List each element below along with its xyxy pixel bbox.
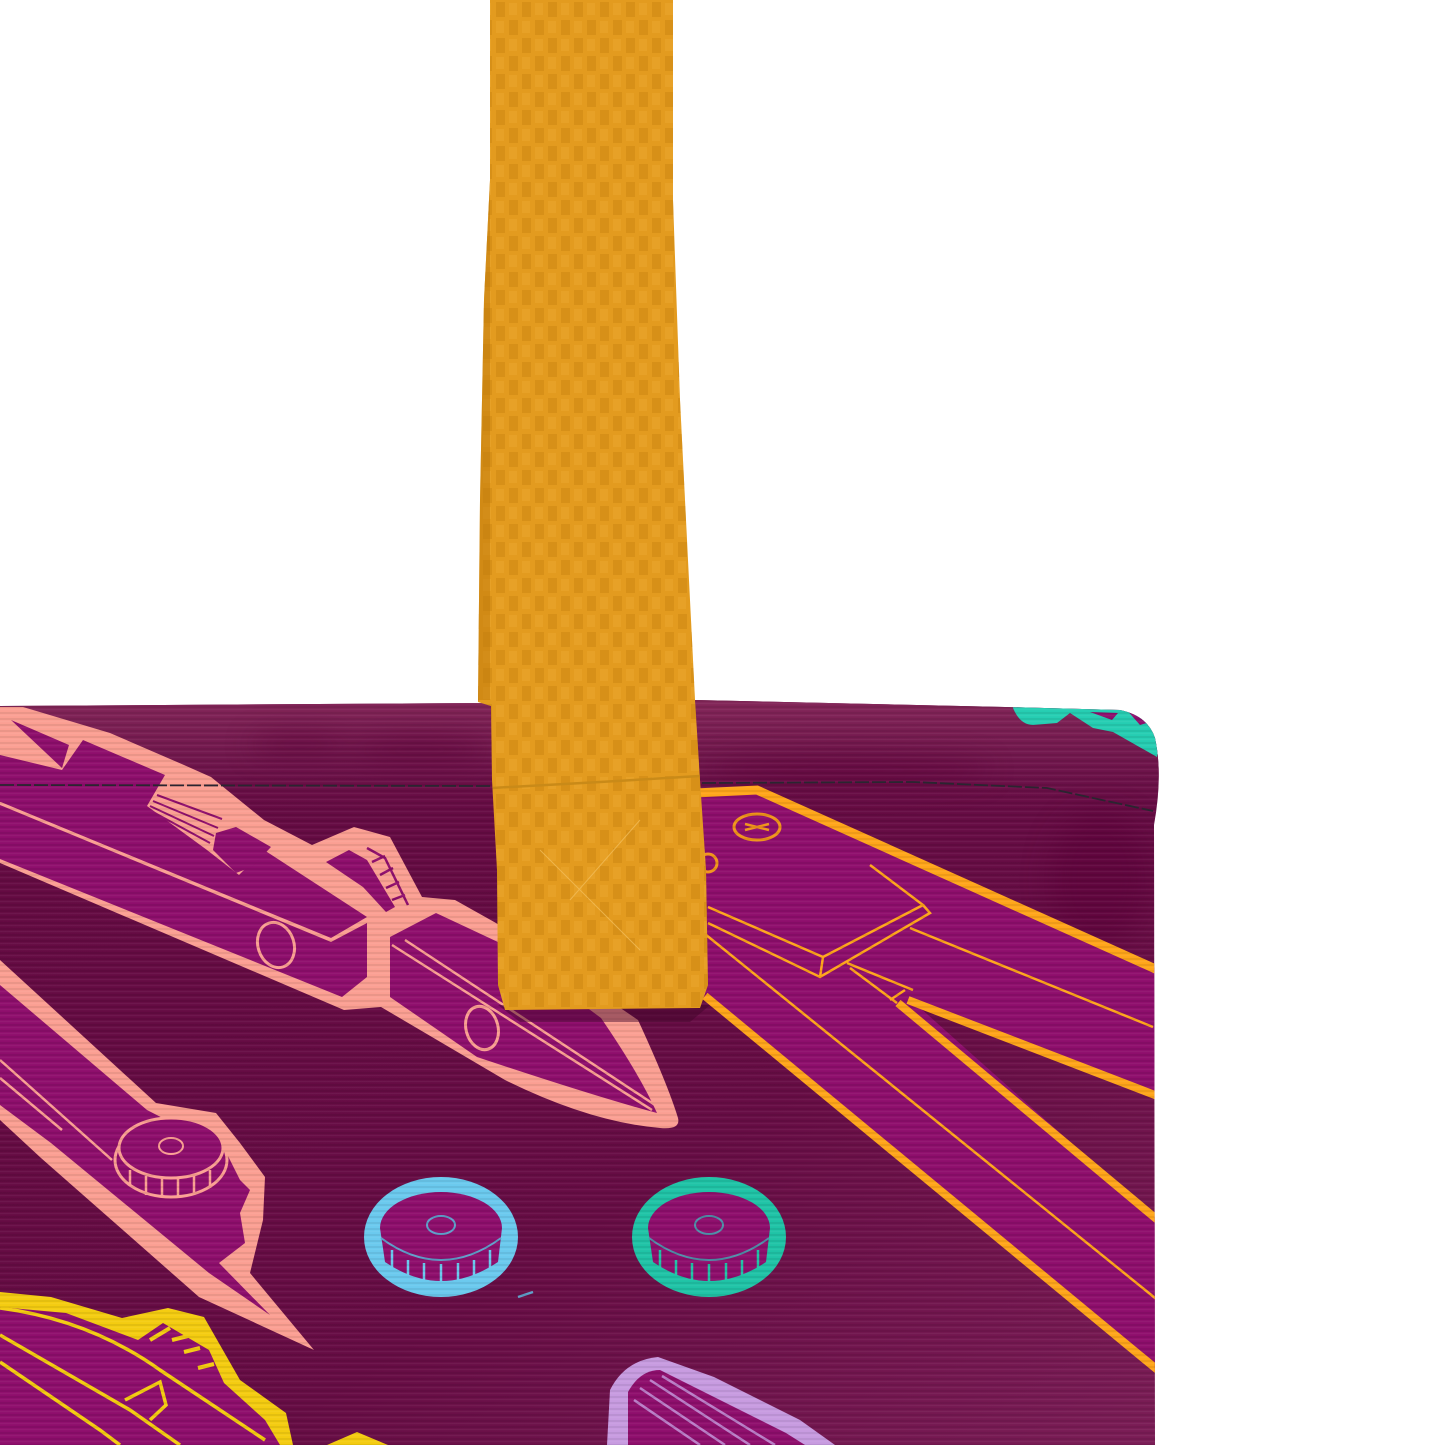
icon: teal shape top right [1013,707,1158,757]
icon: green thumbscrew [632,1177,786,1297]
panel: yellow handle strap [470,0,720,1020]
handle shadow [498,1005,710,1022]
icon: blue thumbscrew [364,1177,518,1297]
panel: bag body [0,695,1170,1445]
icon: yellow compass [0,1292,293,1445]
icon: yellow fragment bottom [327,1432,388,1445]
icon: orange compass [695,788,1160,1372]
knurled collar [150,795,222,843]
handle flap seam [492,776,700,788]
icon: pink compass upper [0,707,678,1128]
icon: small blue mark [518,1292,533,1297]
icon: pink compass lower [0,960,314,1350]
stitch line [0,782,1153,811]
icon: lilac handle [607,1357,835,1445]
